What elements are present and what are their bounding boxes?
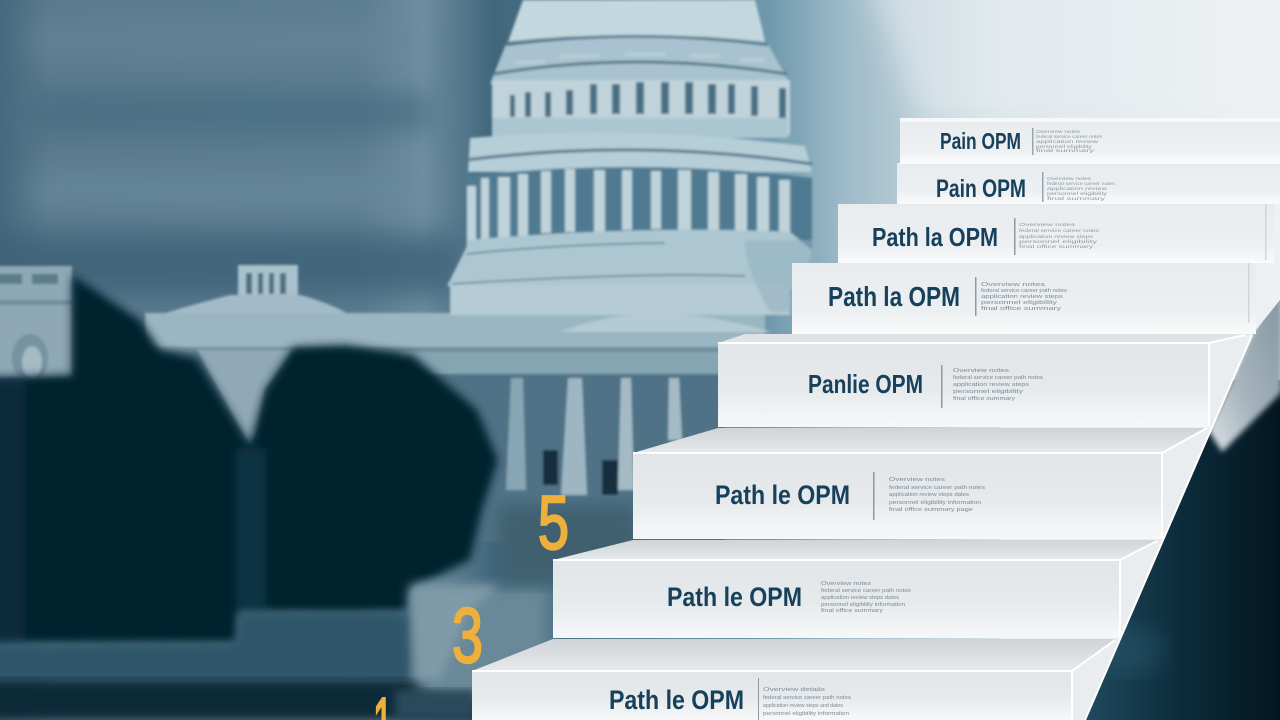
detail text: Overview notes: [981, 282, 1045, 288]
divider: [975, 277, 976, 316]
drum base: [447, 230, 815, 315]
detail text: [889, 477, 985, 513]
detail text: [953, 368, 1043, 402]
detail text: application review steps: [953, 382, 1029, 388]
detail text: federal service career path notes: [821, 588, 911, 594]
detail text: personnel eligibility: [953, 389, 1023, 395]
foreground ground: [0, 505, 638, 720]
divider: [1014, 218, 1016, 255]
face: [838, 204, 1274, 263]
mist: [1208, 300, 1280, 455]
top lip: [900, 118, 1280, 122]
face: [897, 163, 1280, 204]
detail text: [821, 581, 911, 614]
detail text: federal service career path notes: [981, 288, 1067, 294]
heading: Path le OPM: [715, 480, 850, 510]
detail text: federal service career path notes: [889, 485, 985, 491]
step 7: [553, 540, 1157, 638]
heading: Path le OPM: [667, 582, 802, 612]
detail text: application review: [1036, 139, 1099, 144]
face: [792, 263, 1256, 334]
detail text: final office summary: [981, 306, 1061, 312]
detail text: final summary: [1047, 196, 1107, 201]
edges: [718, 335, 1245, 427]
detail text: Overview details: [763, 687, 825, 693]
divider: [758, 678, 759, 720]
detail text: personnel eligibility: [1047, 191, 1108, 196]
tread: [472, 639, 1115, 671]
detail text: application review steps: [1019, 234, 1094, 239]
dome band: [490, 36, 790, 84]
right mist: [860, 0, 1280, 120]
teal glow: [1110, 626, 1164, 674]
detail text: application review steps and dates: [763, 703, 843, 709]
blurred background dome: [0, 20, 460, 295]
face: [553, 560, 1120, 638]
detail text: federal service career path notes: [763, 695, 851, 701]
stair edge highlight: [1085, 335, 1252, 720]
detail text: [1019, 222, 1100, 249]
step 8: [472, 639, 1115, 720]
edges: [472, 640, 1115, 720]
detail text: personnel eligibility: [1036, 144, 1093, 149]
lower colonnade: [466, 167, 812, 252]
face: [472, 671, 1072, 720]
central wing and pediment: [145, 265, 772, 542]
detail text: final summary: [1036, 148, 1096, 153]
heading: Path le OPM: [609, 685, 744, 715]
staircase: [472, 118, 1280, 720]
divider: [1032, 128, 1034, 155]
tread: [553, 540, 1157, 560]
detail text: [981, 282, 1067, 312]
tread: [633, 428, 1207, 453]
detail text: application review steps dates: [821, 595, 899, 601]
right edge: [1248, 263, 1250, 323]
face: [718, 343, 1209, 427]
heading: Pain OPM: [940, 128, 1021, 154]
detail text: final office summary page: [889, 507, 973, 513]
divider: [1042, 172, 1044, 202]
number 3: 3: [452, 591, 483, 679]
detail text: personnel eligibility information: [889, 500, 981, 506]
ledge: [466, 133, 812, 172]
edges: [553, 541, 1157, 638]
detail text: final office summary: [953, 396, 1015, 402]
step 3: [838, 204, 1274, 263]
step 1: [900, 118, 1280, 164]
face: [633, 453, 1162, 539]
capitol building: [0, 0, 815, 542]
plinth: [412, 586, 548, 700]
detail text: final office summary: [821, 608, 883, 614]
detail text: personnel eligibility information: [821, 602, 905, 608]
detail text: federal service career notes: [1047, 181, 1116, 186]
dark trees: [0, 275, 498, 643]
ground lower: [0, 680, 480, 720]
face: [900, 118, 1280, 164]
dome top: [508, 0, 765, 42]
heading: Path la OPM: [828, 281, 960, 312]
detail text: personnel eligibility: [1019, 239, 1099, 244]
detail text: Overview notes: [1019, 222, 1076, 227]
detail text: personnel eligibility information: [763, 711, 849, 717]
heading: Path la OPM: [872, 222, 998, 252]
dark area: [1085, 380, 1280, 720]
step 4: [792, 263, 1256, 334]
edges: [633, 428, 1207, 539]
upper colonnade: [492, 80, 790, 138]
divider: [873, 472, 874, 520]
right edge: [1265, 204, 1266, 260]
tread: [718, 334, 1252, 343]
detail text: Overview notes: [889, 477, 945, 483]
heading: Panlie OPM: [808, 369, 923, 399]
step 2: [897, 163, 1280, 204]
stair body: [1000, 300, 1252, 720]
foot shade: [395, 690, 475, 720]
step 5: [718, 334, 1252, 427]
detail text: Overview notes: [953, 368, 1009, 374]
detail text: [1047, 176, 1116, 201]
number 5: 5: [538, 481, 569, 566]
detail text: Overview notes: [1036, 129, 1081, 134]
detail text: final office summary: [1019, 244, 1094, 249]
detail text: application review: [1047, 186, 1108, 191]
detail text: federal service career notes: [1036, 134, 1103, 139]
detail text: application review steps: [981, 294, 1063, 300]
left wing building: [0, 266, 72, 382]
heading: Pain OPM: [936, 175, 1026, 203]
detail text: federal service career path notes: [953, 375, 1043, 381]
detail text: [763, 687, 851, 717]
right shade: [498, 505, 638, 585]
detail text: personnel eligibility: [981, 300, 1057, 306]
detail text: application review steps dates: [889, 492, 969, 498]
right dark corner: [1085, 270, 1280, 720]
step 6: [633, 428, 1207, 539]
detail text: [1036, 129, 1103, 153]
detail text: Overview notes: [821, 581, 871, 587]
detail text: federal service career notes: [1019, 228, 1100, 233]
detail text: Overview notes: [1047, 176, 1092, 181]
divider: [941, 365, 942, 408]
ground band: [0, 612, 412, 682]
